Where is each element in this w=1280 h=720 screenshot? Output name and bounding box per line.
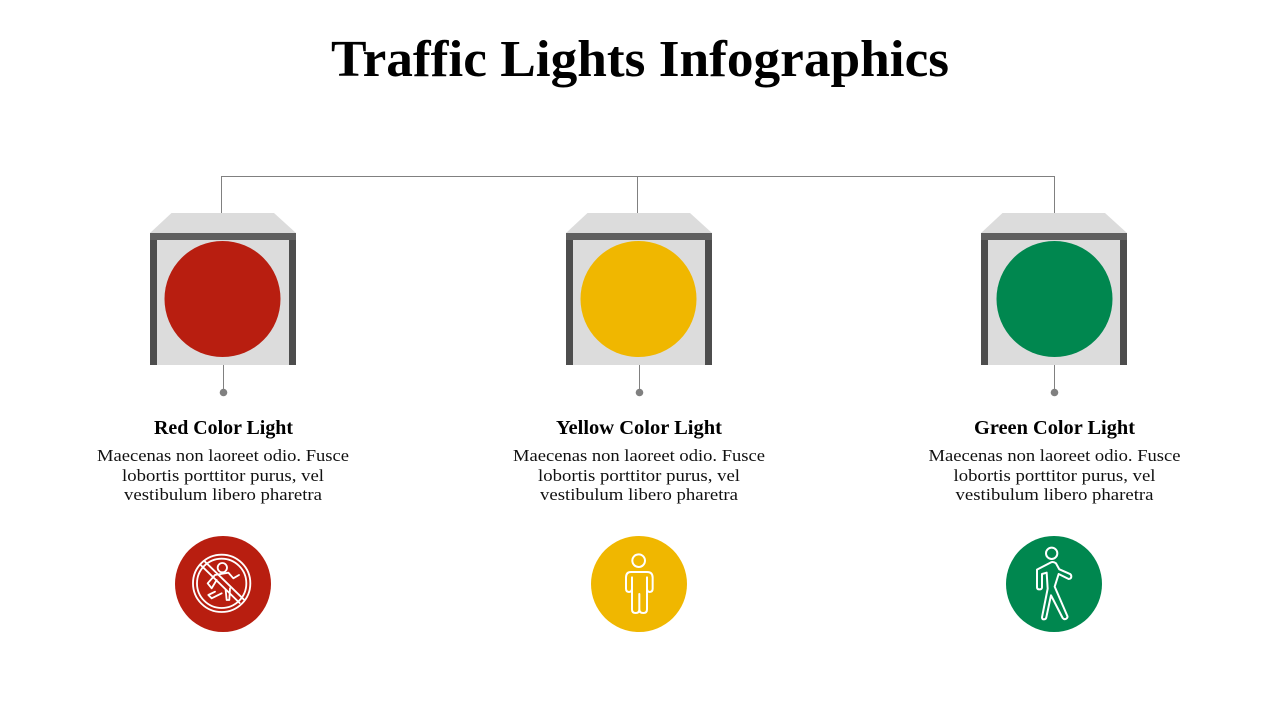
pointer: green [1051,365,1058,396]
description: red: lobortis porttitor purus, vel [122,466,324,485]
panel: yellow light [513,213,765,632]
description: green: vestibulum libero pharetra [956,485,1154,504]
description: red: Maecenas non laoreet odio. Fusce [97,446,349,465]
heading: red: Red Color Light [154,417,293,439]
traffic light: red [150,213,296,365]
icon: no running [175,536,271,632]
pointer: yellow [636,365,643,396]
heading: green: Green Color Light [974,417,1135,439]
icon: standing person [591,536,687,632]
description: red [97,446,349,504]
description: yellow: lobortis porttitor purus, vel [538,466,740,485]
description: red: vestibulum libero pharetra [124,485,322,504]
icon: walking person [1006,536,1102,632]
traffic light: green [981,213,1127,365]
description: yellow: Maecenas non laoreet odio. Fusce [513,446,765,465]
connector lines [222,176,1054,213]
panel: green light [928,213,1180,632]
description: yellow [513,446,765,504]
description: green: Maecenas non laoreet odio. Fusce [928,446,1180,465]
description: yellow: vestibulum libero pharetra [540,485,738,504]
description: green: lobortis porttitor purus, vel [954,466,1156,485]
traffic light: yellow [566,213,712,365]
title: Traffic Lights Infographics [331,31,949,88]
description: green [928,446,1180,504]
heading: yellow: Yellow Color Light [556,417,722,439]
pointer: red [220,365,227,396]
panel: red light [97,213,349,632]
